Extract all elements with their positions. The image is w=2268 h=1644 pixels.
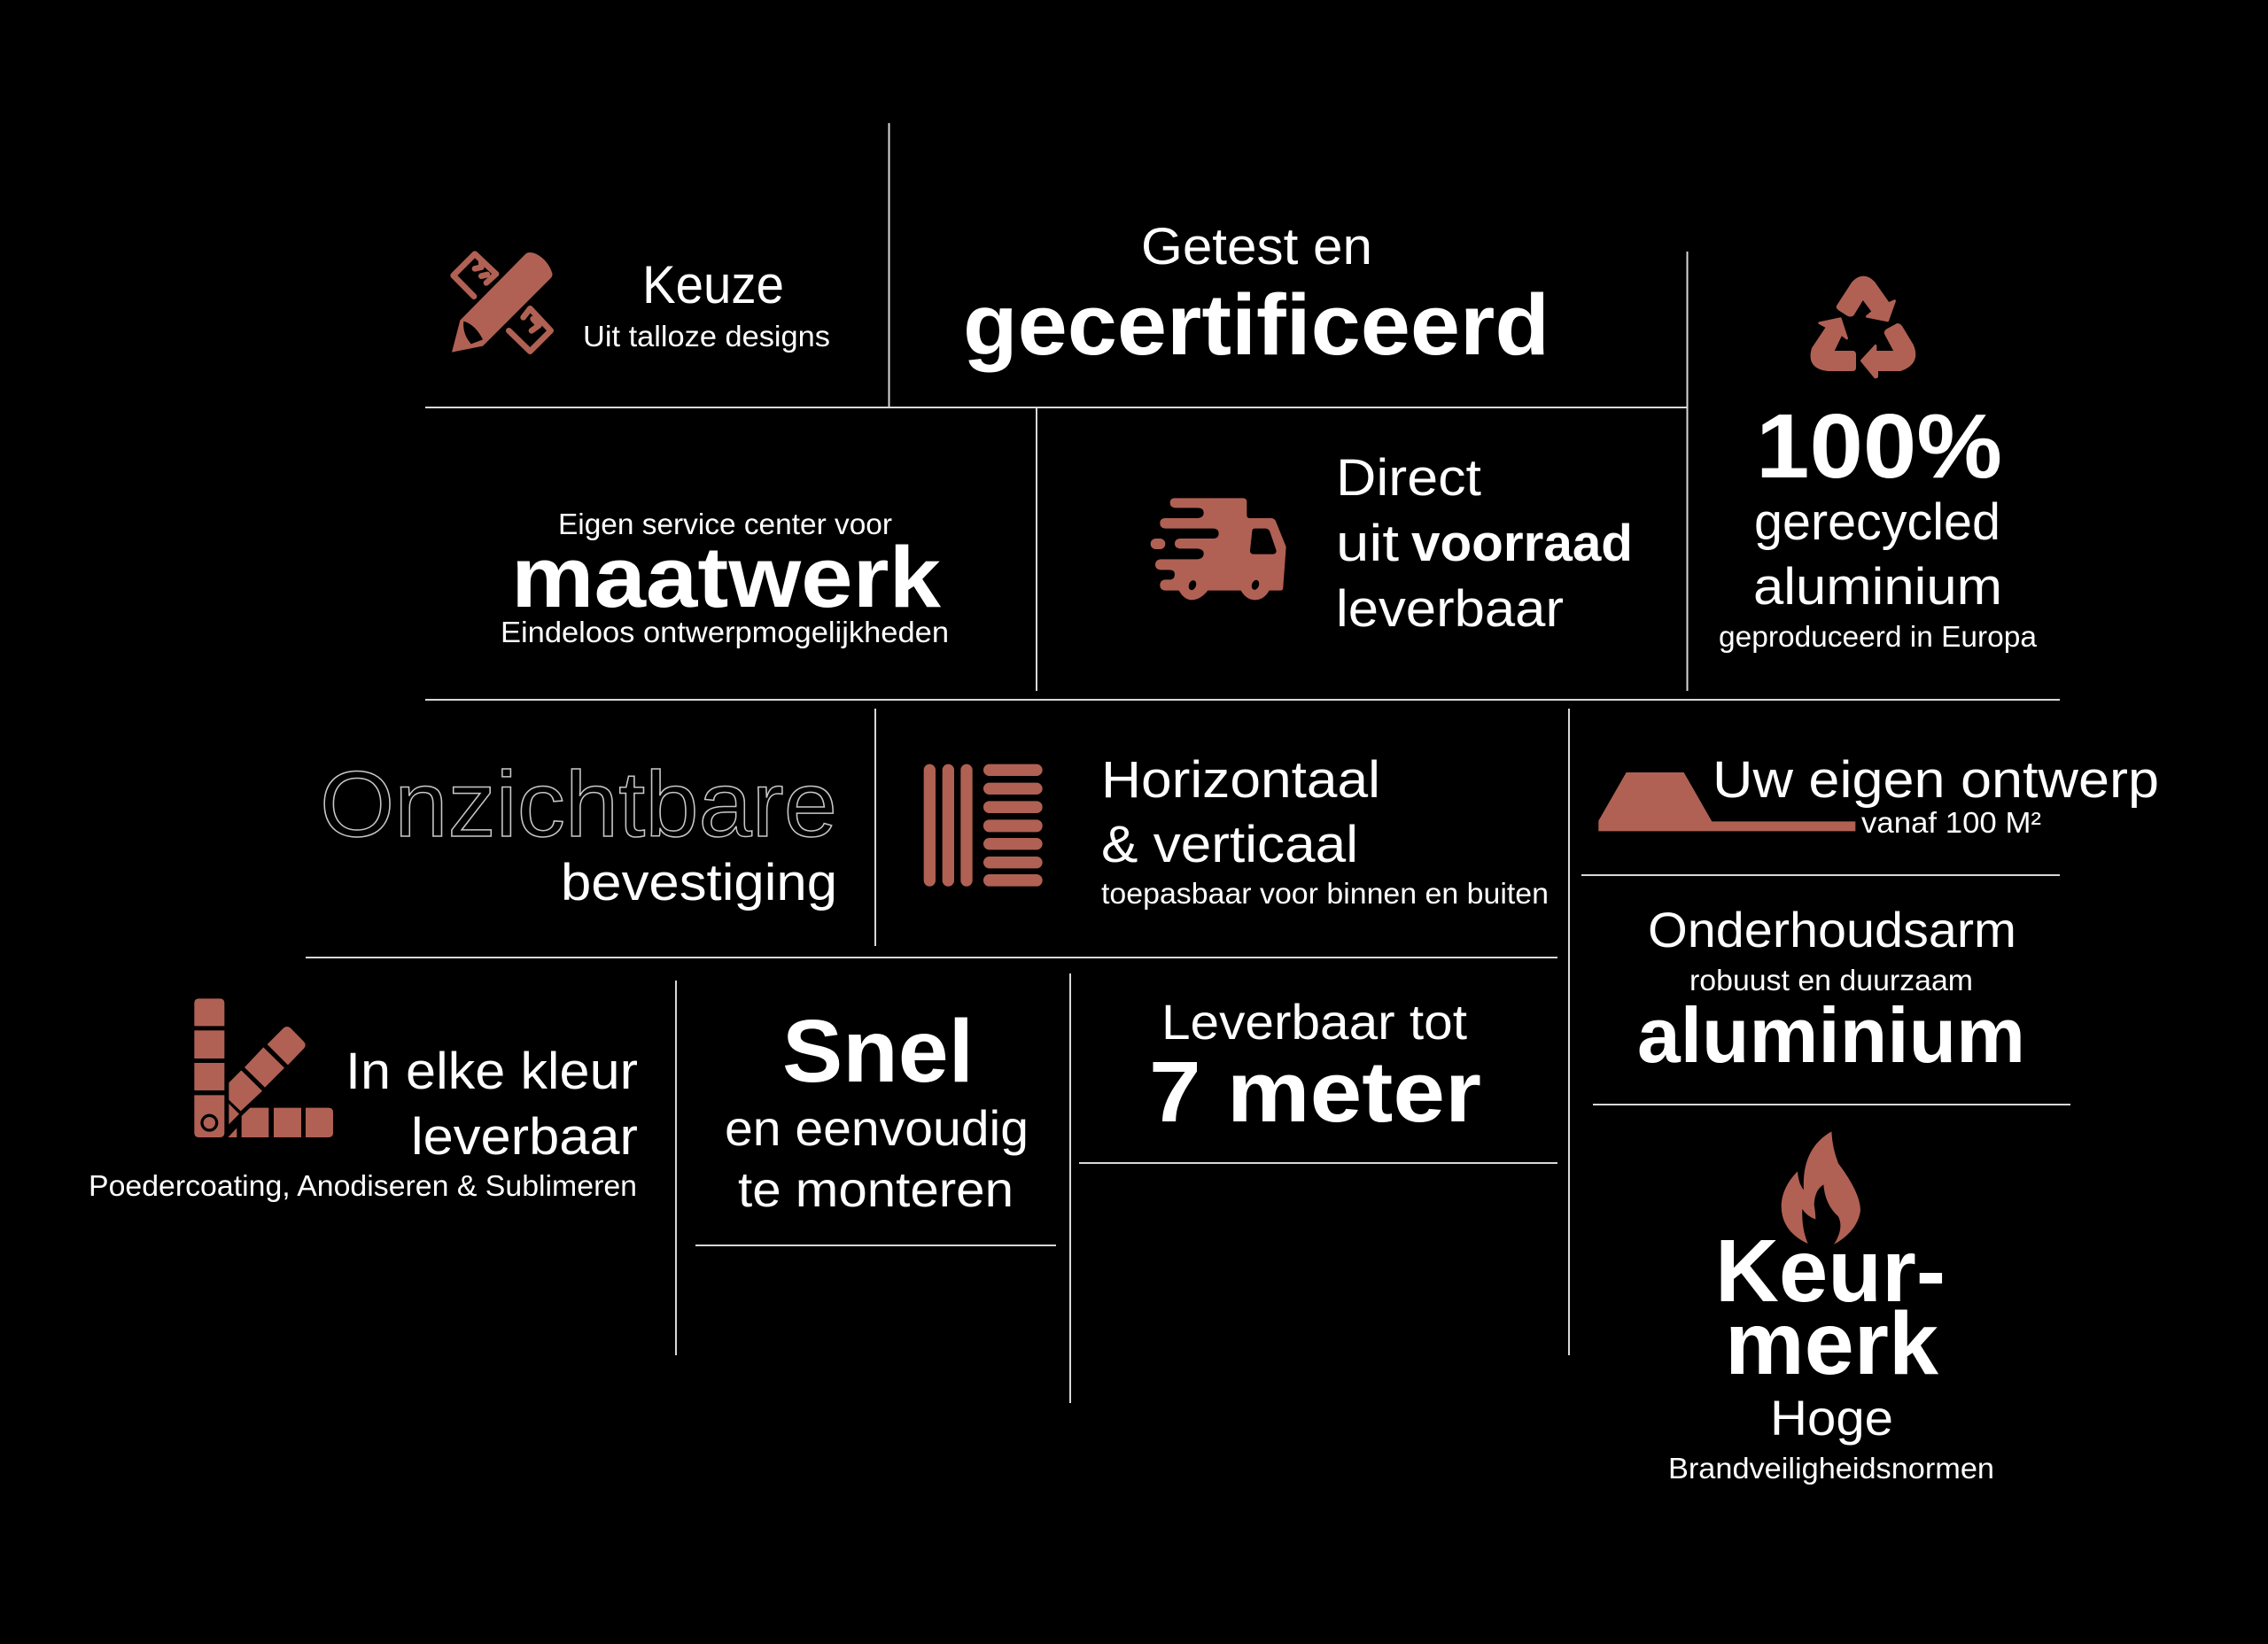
panel: horizontaal en verticaal <box>924 751 1549 910</box>
panel: gecertificeerd <box>963 218 1550 373</box>
panel: keuze <box>452 252 830 353</box>
icon: pencil and ruler <box>452 252 552 353</box>
icon: flame <box>1782 1131 1860 1245</box>
heading: Getest en: Getest en <box>1141 218 1372 275</box>
text: bevestiging: bevestiging <box>561 854 837 911</box>
icon: recycle <box>1812 277 1915 377</box>
panel: leverbaar tot 7 meter <box>1149 994 1481 1140</box>
panel: keurmerk <box>1668 1131 1994 1485</box>
icon: delivery truck <box>1151 498 1286 600</box>
heading: Keur-: Keur- <box>1715 1221 1946 1321</box>
text: Onderhoudsarm: Onderhoudsarm <box>1648 902 2016 958</box>
panel: uw eigen ontwerp <box>1598 751 2159 839</box>
panel: 100% gerecycled <box>1719 277 2038 653</box>
heading: Keuze: Keuze <box>642 255 784 314</box>
text: Leverbaar tot: Leverbaar tot <box>1161 994 1467 1050</box>
text: Direct: Direct <box>1336 449 1481 507</box>
text: In elke kleur: In elke kleur <box>346 1043 638 1100</box>
icon: profile shape <box>1598 772 1855 831</box>
subtext: Brandveiligheidsnormen: Brandveiligheidsnormen <box>1668 1452 1994 1485</box>
text: Eindeloos ontwerpmogelijkheden: Eindeloos ontwerpmogelijkheden <box>501 616 949 648</box>
heading: Uw eigen ontwerp: Uw eigen ontwerp <box>1713 751 2159 809</box>
text: leverbaar: leverbaar <box>1336 580 1564 638</box>
heading: 7 meter: 7 meter <box>1149 1043 1481 1140</box>
heading: gecertificeerd: gecertificeerd <box>963 276 1550 373</box>
subtext: vanaf 100 M²: vanaf 100 M² <box>1861 806 2041 839</box>
heading: Snel: Snel <box>782 1002 974 1101</box>
text: Hoge: Hoge <box>1770 1390 1893 1446</box>
text: leverbaar: leverbaar <box>411 1108 638 1166</box>
panel: snel te monteren <box>725 1002 1029 1217</box>
text: gerecycled: gerecycled <box>1754 493 2000 551</box>
icon: vertical and horizontal slats <box>924 764 1043 887</box>
heading: 100%: 100% <box>1756 395 2002 497</box>
text: uit: uit <box>1336 515 1399 572</box>
subtext: geproduceerd in Europa: geproduceerd in Europa <box>1719 620 2038 653</box>
panel: direct uit voorraad <box>1151 449 1633 638</box>
heading: merk: merk <box>1725 1294 1938 1393</box>
text: en eenvoudig: en eenvoudig <box>725 1100 1029 1156</box>
heading: Onzichtbare outline: Onzichtbare <box>320 753 837 857</box>
text: te monteren: te monteren <box>738 1161 1014 1217</box>
icon: colour swatch fan <box>194 998 333 1137</box>
subtext: Poedercoating, Anodiseren & Sublimeren: Poedercoating, Anodiseren & Sublimeren <box>89 1169 637 1202</box>
heading: maatwerk: maatwerk <box>511 529 942 625</box>
subtext: Uit talloze designs: Uit talloze designs <box>583 320 830 353</box>
panel: onzichtbare bevestiging <box>320 753 837 911</box>
text: voorraad: voorraad <box>1411 515 1633 572</box>
text: Eigen service center voor: Eigen service center voor <box>558 508 892 540</box>
subtext: toepasbaar voor binnen en buiten: toepasbaar voor binnen en buiten <box>1101 877 1549 910</box>
text: Horizontaal: Horizontaal <box>1101 751 1380 809</box>
text: aluminium: aluminium <box>1753 558 2002 616</box>
text: & verticaal: & verticaal <box>1101 816 1358 873</box>
panel: maatwerk <box>501 508 949 648</box>
panel: onderhoudsarm aluminium <box>1637 902 2025 1079</box>
panel: in elke kleur <box>89 998 638 1202</box>
subtext: robuust en duurzaam: robuust en duurzaam <box>1689 964 1973 996</box>
heading: aluminium: aluminium <box>1637 991 2025 1079</box>
